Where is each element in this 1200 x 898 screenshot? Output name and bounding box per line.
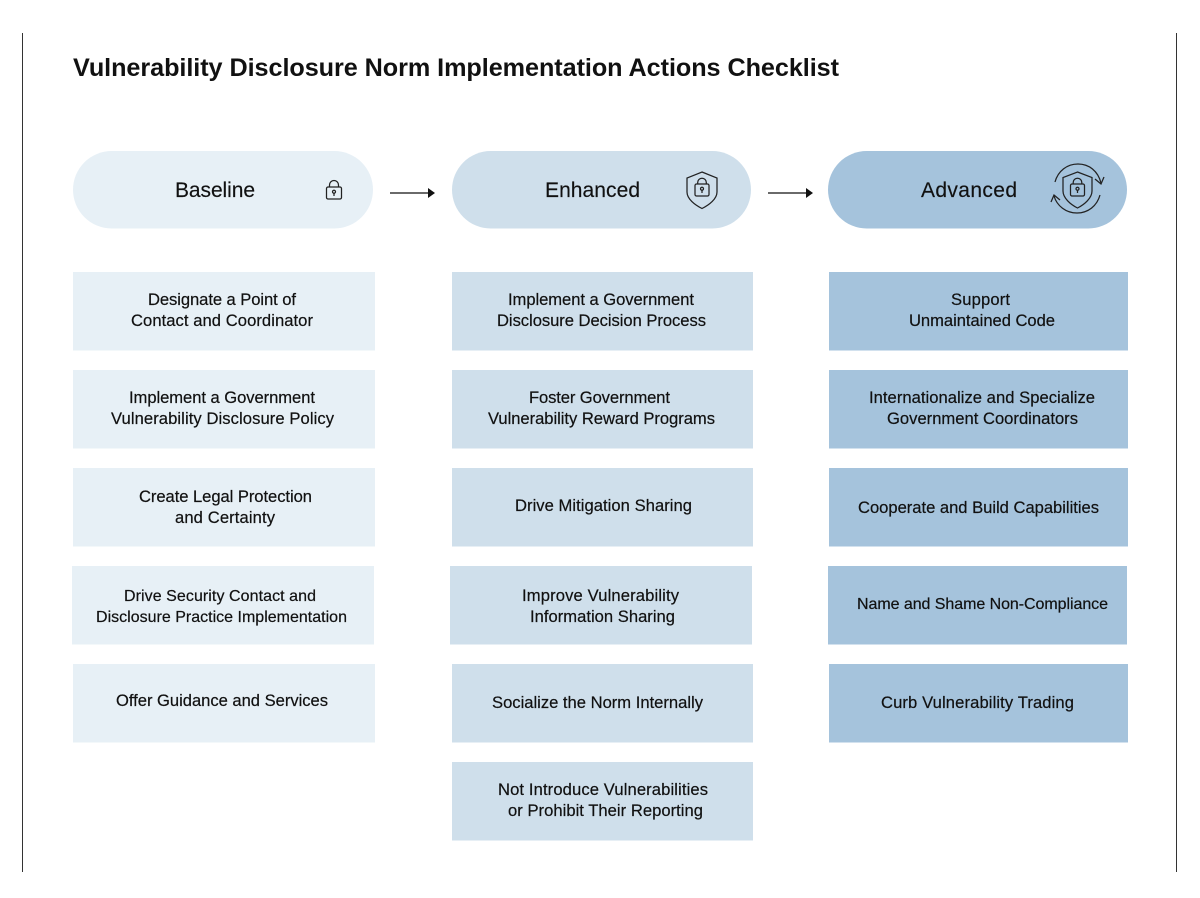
action card (73, 272, 375, 350)
panel: advanced header: Advanced (921, 179, 1017, 202)
action card: Internationalize and Specialize (869, 388, 1095, 407)
action card (828, 566, 1127, 644)
panel: baseline actions (72, 272, 375, 742)
action card (829, 272, 1128, 350)
action card (452, 762, 753, 840)
action card: Government Coordinators (887, 409, 1078, 428)
action card: Unmaintained Code (909, 311, 1055, 330)
action card (73, 468, 375, 546)
action card: Vulnerability Disclosure Policy (111, 409, 335, 428)
action card (452, 468, 753, 546)
action card (829, 468, 1128, 546)
action card: and Certainty (175, 508, 276, 527)
action card: Disclosure Decision Process (497, 311, 706, 330)
action card: Not Introduce Vulnerabilities (498, 780, 708, 799)
action card: Implement a Government (508, 290, 694, 309)
action card (829, 370, 1128, 448)
action card (452, 370, 753, 448)
action card (73, 370, 375, 448)
action card: Drive Mitigation Sharing (515, 496, 692, 515)
panel: advanced header (828, 151, 1127, 228)
action card: Cooperate and Build Capabilities (858, 498, 1099, 517)
title: Vulnerability Disclosure Norm Implementation Actions Checklist (73, 54, 840, 82)
action card (452, 272, 753, 350)
action card: Contact and Coordinator (131, 311, 313, 330)
icon: rotating shield lock (1051, 164, 1104, 213)
arrow: enhanced to advanced (768, 188, 813, 198)
action card: Foster Government (529, 388, 670, 407)
action card: Offer Guidance and Services (116, 691, 328, 710)
panel: enhanced header: Enhanced (545, 179, 640, 202)
action card: Designate a Point of (148, 290, 296, 309)
action card (829, 664, 1128, 742)
action card: Improve Vulnerability (522, 586, 680, 605)
action card: Name and Shame Non-Compliance (857, 596, 1108, 613)
panel: enhanced header (452, 151, 751, 228)
action card: Disclosure Practice Implementation (96, 609, 347, 626)
icon: shield lock (687, 172, 717, 208)
arrow: baseline to enhanced (390, 188, 435, 198)
action card: Create Legal Protection (139, 487, 312, 506)
action card: Information Sharing (530, 607, 675, 626)
action card: Drive Security Contact and (124, 588, 316, 605)
icon: lock (326, 180, 342, 199)
action card: Support (951, 290, 1010, 309)
action card: Socialize the Norm Internally (492, 693, 704, 712)
action card (452, 664, 753, 742)
action card: Vulnerability Reward Programs (488, 409, 715, 428)
action card (72, 566, 374, 644)
action card: or Prohibit Their Reporting (508, 801, 703, 820)
action card: Implement a Government (129, 388, 315, 407)
action card (73, 664, 375, 742)
panel: baseline header: Baseline (175, 179, 255, 202)
action card: Curb Vulnerability Trading (881, 693, 1074, 712)
panel: advanced actions (828, 272, 1128, 742)
panel: baseline header (73, 151, 373, 228)
panel: enhanced actions (450, 272, 753, 840)
action card (450, 566, 752, 644)
